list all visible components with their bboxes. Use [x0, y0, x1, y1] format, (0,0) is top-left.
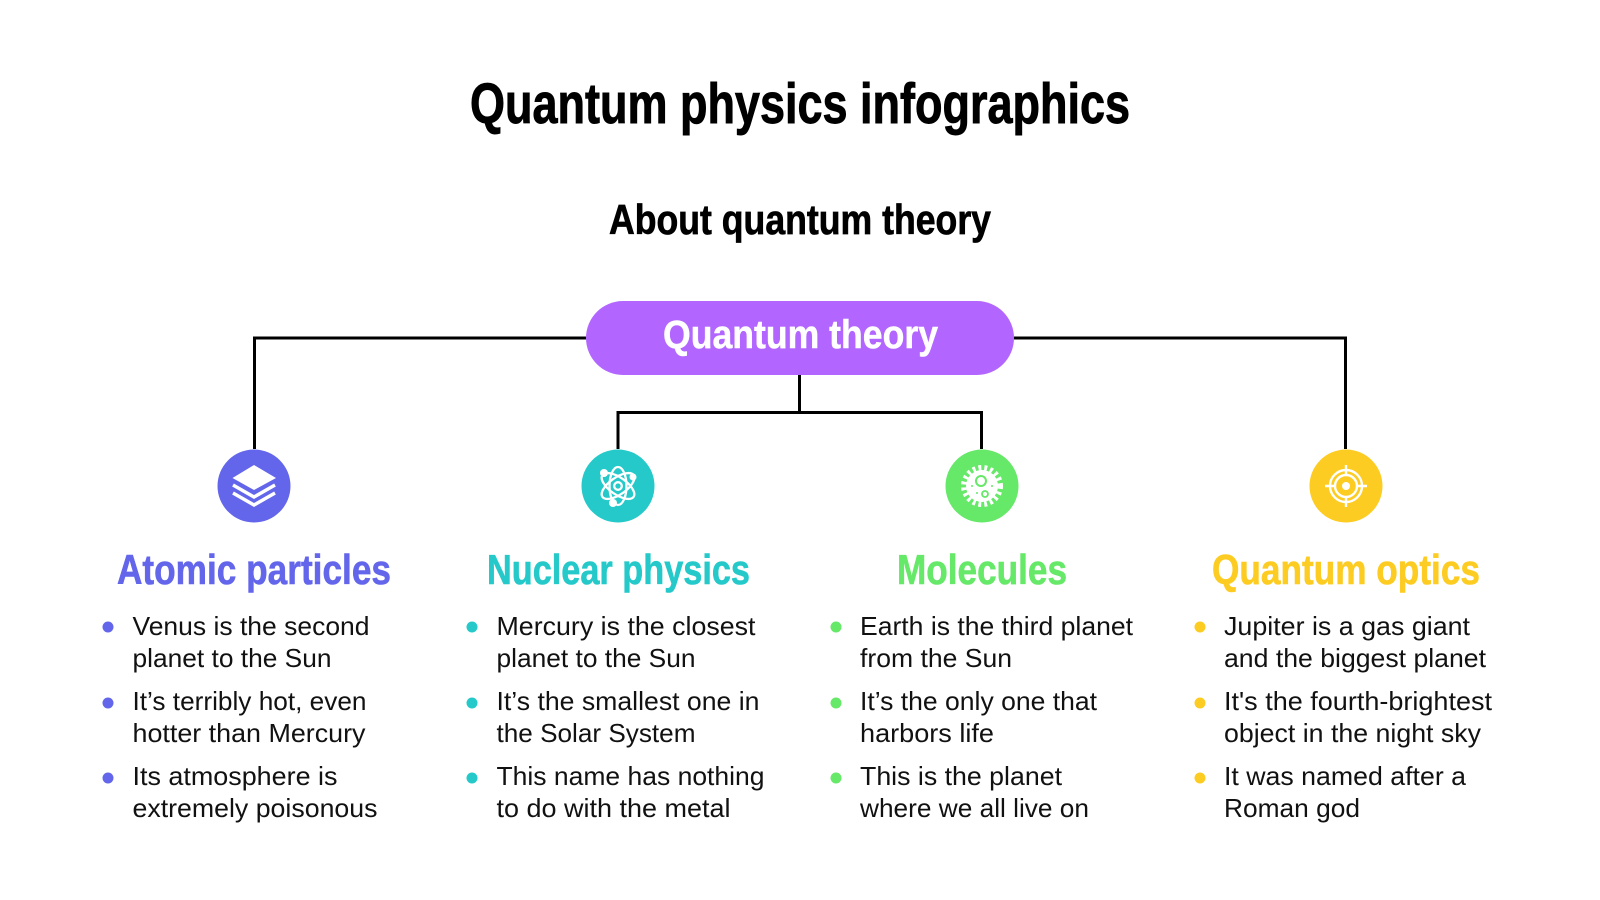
bullet list: Molecules: It’s the only one that [860, 686, 1098, 716]
subtitle: About quantum theory [609, 196, 992, 243]
bullet list: Atomic particles [102, 611, 378, 823]
heading: Atomic particles: Atomic particles [117, 546, 391, 593]
column: Nuclear physics [466, 450, 764, 823]
bullet list: Atomic particles: hotter than Mercury [132, 718, 366, 748]
bullet list: Quantum optics: and the biggest planet [1224, 643, 1487, 673]
heading: Quantum optics: Quantum optics [1212, 546, 1480, 593]
bullet list: Nuclear physics: planet to the Sun [496, 643, 696, 673]
icon: spiky cell [946, 450, 1018, 522]
bullet list: Quantum optics: Jupiter is a gas giant [1224, 611, 1471, 641]
icon: layers [218, 450, 290, 522]
bullet list: Quantum optics: It was named after a [1224, 761, 1467, 791]
bullet list: Atomic particles: planet to the Sun [132, 643, 332, 673]
column: Atomic particles [102, 450, 391, 823]
bullet list: Atomic particles: Venus is the second [132, 611, 370, 641]
bullet list: Atomic particles: extremely poisonous [132, 793, 378, 823]
central node: Quantum theory: Quantum theory [663, 313, 939, 357]
bullet list: Atomic particles: Its atmosphere is [132, 761, 338, 791]
bullet list: Molecules: harbors life [860, 718, 994, 748]
icon: target [1310, 450, 1382, 522]
bullet list: Quantum optics: Roman god [1224, 793, 1360, 823]
bullet list: Nuclear physics: This name has nothing [496, 761, 764, 791]
connector lines [254, 338, 1346, 449]
column: Quantum optics [1194, 450, 1493, 823]
bullet list: Molecules: where we all live on [859, 793, 1089, 823]
title: Quantum physics infographics [470, 72, 1130, 136]
bullet list: Molecules: from the Sun [860, 643, 1012, 673]
bullet list: Quantum optics: object in the night sky [1224, 718, 1481, 748]
heading: Nuclear physics: Nuclear physics [487, 546, 750, 593]
bullet list: Molecules: This is the planet [860, 761, 1063, 791]
bullet list: Nuclear physics: Mercury is the closest [496, 611, 756, 641]
bullet list: Nuclear physics: the Solar System [496, 718, 696, 748]
heading: Molecules: Molecules [897, 546, 1067, 593]
bullet list: Molecules [830, 611, 1134, 823]
bullet list: Atomic particles: It’s terribly hot, even [132, 686, 366, 716]
bullet list: Quantum optics [1194, 611, 1493, 823]
bullet list: Nuclear physics [466, 611, 764, 823]
bullet list: Nuclear physics: It’s the smallest one in [496, 686, 760, 716]
bullet list: Nuclear physics: to do with the metal [496, 793, 730, 823]
central node: Quantum theory [586, 301, 1014, 375]
icon: atom [582, 450, 654, 522]
column: Molecules [830, 450, 1134, 823]
bullet list: Molecules: Earth is the third planet [860, 611, 1134, 641]
bullet list: Quantum optics: It's the fourth-brightest [1224, 686, 1493, 716]
